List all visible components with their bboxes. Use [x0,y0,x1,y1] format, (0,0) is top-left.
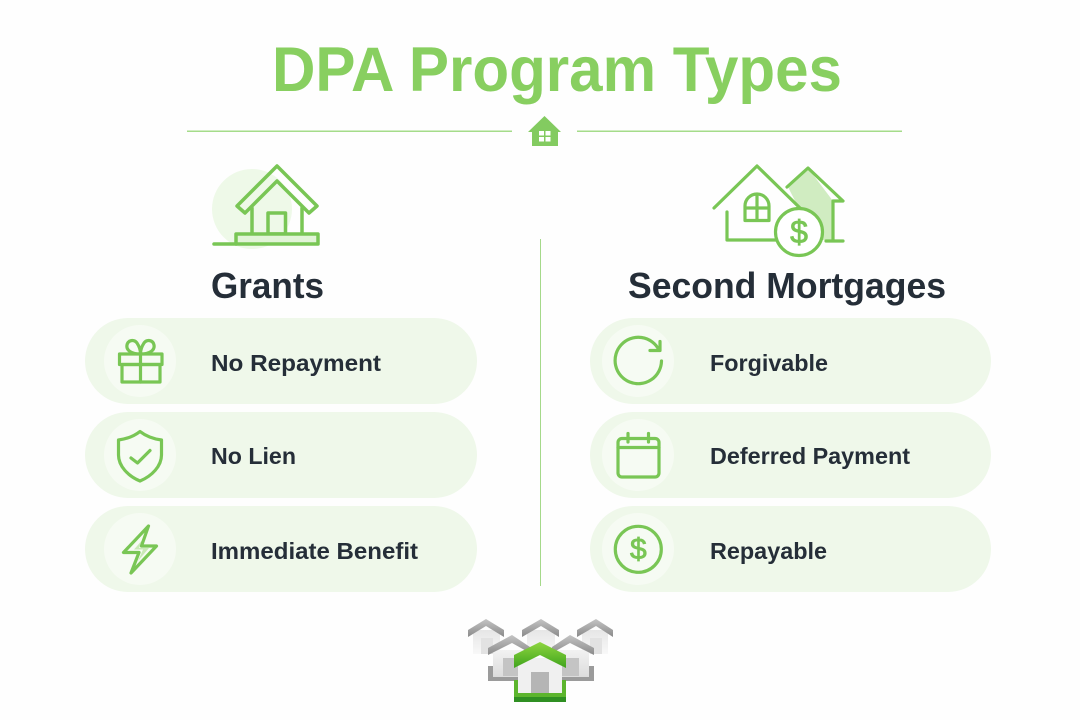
item: immediate benefit [85,506,477,592]
panel: grants [85,166,477,592]
item: repayable [590,506,991,592]
title: DPA Program Types [272,35,842,105]
icon: dollar coin [615,526,661,572]
center divider [540,239,541,586]
label: Forgivable [710,350,828,376]
label: No Lien [211,443,296,469]
icon: dollar coin: $ [630,533,647,566]
item: no lien [85,412,477,498]
icon: neighbourhood of houses [468,619,613,702]
icon: refresh arrow [615,337,662,384]
label: Repayable [710,538,827,564]
title divider with house icon [187,116,902,146]
panel: second mortgages [590,166,991,592]
icon: calendar [618,434,659,477]
icon: small house [528,116,561,146]
label: No Repayment [211,350,381,376]
heading: second mortgages: Second Mortgages [628,265,946,306]
heading: grants: Grants [211,265,324,306]
icon: second mortgages houses: $ [790,214,808,250]
icon: gift [120,341,162,382]
item: forgivable [590,318,991,404]
icon: shield [118,432,162,481]
icon: second mortgages houses [714,166,843,256]
label: Immediate Benefit [211,538,418,564]
icon: grants house [212,166,318,249]
item: no repayment [85,318,477,404]
label: Deferred Payment [710,443,910,469]
icon: lightning [124,526,156,573]
item: deferred payment [590,412,991,498]
